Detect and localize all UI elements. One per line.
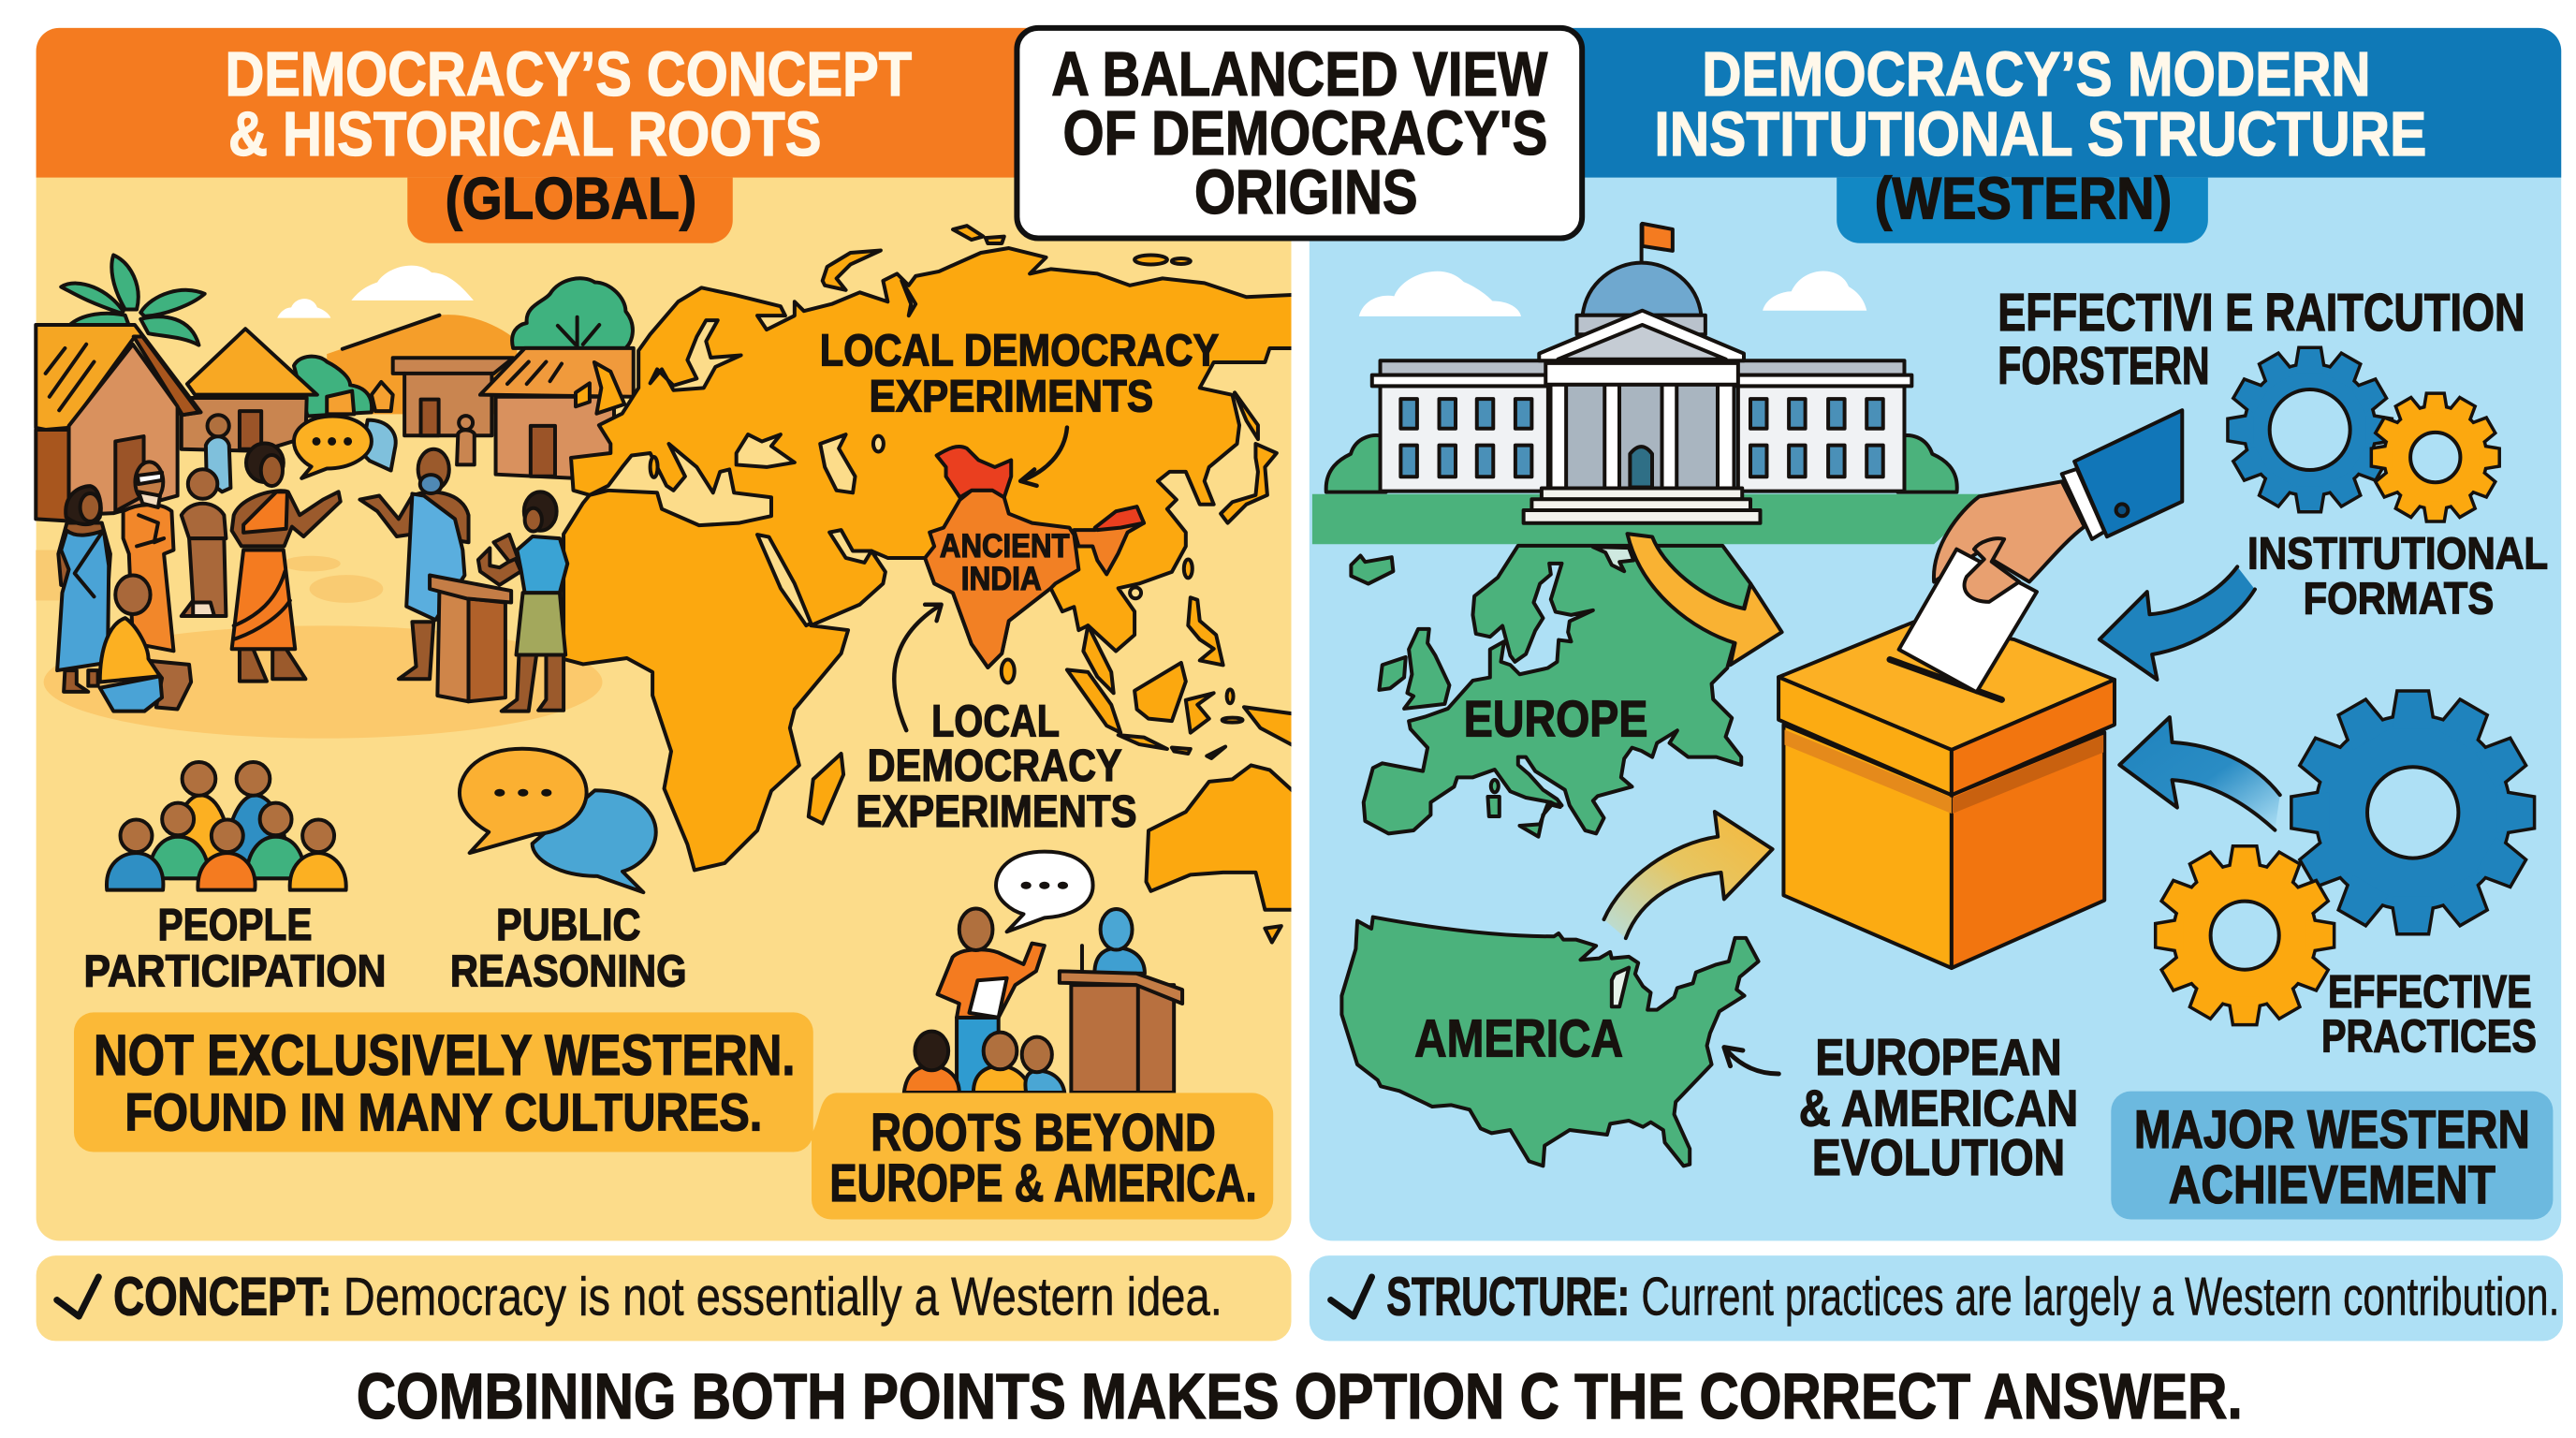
map of america — [1341, 917, 1759, 1166]
effective institution label: FORSTERN — [1998, 336, 2210, 395]
ancient india label — [940, 528, 1070, 597]
concept summary strip: Democracy is not essentially a Western idea. — [344, 1267, 1222, 1327]
left header tab — [407, 178, 733, 243]
eurasia and africa — [564, 248, 1295, 870]
conclusion: COMBINING BOTH POINTS MAKES OPTION C THE CORRECT ANSWER. — [357, 1360, 2243, 1432]
left header band — [37, 28, 1051, 178]
india highlight — [925, 447, 1144, 682]
people participation label: PEOPLE — [157, 900, 312, 950]
title box: OF DEMOCRACY'S — [1063, 99, 1547, 169]
effective practices label — [2321, 967, 2537, 1062]
gear: upper orange — [2373, 395, 2497, 520]
ancient india label: INDIA — [961, 561, 1042, 597]
right header band — [1544, 28, 2561, 178]
hand casting ballot — [1899, 410, 2182, 692]
european and american evolution label: & AMERICAN — [1799, 1079, 2078, 1137]
people participation label: PARTICIPATION — [84, 946, 386, 996]
villager: man in brown — [182, 469, 226, 616]
icon: check mark — [1331, 1277, 1372, 1316]
callout: not exclusively western: FOUND IN MANY CULTURES. — [124, 1083, 762, 1142]
right header tab — [1837, 178, 2208, 243]
left heading: (GLOBAL) — [446, 166, 696, 231]
capitol building — [1326, 224, 1957, 523]
map labels — [820, 326, 1219, 422]
gear: lower orange — [2157, 847, 2333, 1023]
arrow to india from north — [1020, 428, 1067, 486]
title box: A BALANCED VIEW — [1051, 40, 1547, 110]
public reasoning label: REASONING — [450, 946, 687, 996]
callout: roots beyond europe and america: EUROPE & AMERICA. — [829, 1153, 1257, 1212]
institutional formats label: FORMATS — [2304, 574, 2494, 624]
gear: upper blue — [2230, 349, 2391, 510]
effective practices label: EFFECTIVE — [2328, 967, 2532, 1018]
callout: not exclusively western — [74, 1012, 813, 1152]
callout: major western achievement — [2111, 1092, 2553, 1220]
panel: concept and historical roots — [37, 28, 1292, 1240]
map labels: LOCAL DEMOCRACY — [820, 326, 1219, 376]
villager: woman in blue — [57, 486, 110, 692]
lower map label: DEMOCRACY — [868, 741, 1122, 791]
title box: ORIGINS — [1194, 158, 1418, 227]
callout: major western achievement: ACHIEVEMENT — [2169, 1155, 2496, 1215]
village ground — [36, 550, 603, 739]
villager: seated figure — [100, 575, 191, 712]
seas — [590, 281, 1141, 625]
lower map label — [856, 696, 1137, 837]
icon: crowd of people — [107, 762, 346, 890]
world map — [564, 226, 1295, 943]
callout: not exclusively western: NOT EXCLUSIVELY WESTERN. — [94, 1023, 795, 1088]
lower map label: EXPERIMENTS — [856, 786, 1137, 837]
europe label: EUROPE — [1464, 690, 1647, 747]
arrow: gears to ballot box — [2119, 717, 2280, 830]
arrow: evolution label to america — [1724, 1048, 1778, 1074]
map labels: EXPERIMENTS — [869, 372, 1153, 422]
public reasoning label: PUBLIC — [496, 900, 640, 950]
podium — [430, 575, 511, 701]
map of europe — [1351, 546, 1750, 837]
right heading: DEMOCRACY’S MODERN — [1702, 40, 2371, 110]
lower map label: LOCAL — [931, 696, 1060, 746]
european and american evolution label — [1799, 1029, 2078, 1186]
concept summary strip: CONCEPT: — [113, 1267, 332, 1327]
icon: speaker at podium with audience — [904, 852, 1182, 1093]
european and american evolution label: EVOLUTION — [1812, 1129, 2065, 1186]
islands — [576, 226, 1295, 943]
villagers in discussion — [57, 415, 567, 712]
panel: modern institutional structure — [1310, 28, 2561, 1240]
left heading: DEMOCRACY’S CONCEPT — [225, 40, 912, 110]
european and american evolution label: EUROPEAN — [1815, 1029, 2062, 1086]
structure summary strip: STRUCTURE: — [1386, 1267, 1630, 1327]
arrow to india from south — [894, 605, 942, 730]
callout: roots beyond europe and america — [812, 1093, 1273, 1220]
institutional formats label — [2247, 528, 2548, 624]
right heading: (WESTERN) — [1875, 166, 2172, 231]
icon: lower gears — [2157, 693, 2533, 1023]
structure summary strip — [1310, 1255, 2563, 1341]
public reasoning label — [450, 900, 687, 996]
concept summary strip — [37, 1255, 1292, 1341]
village clouds — [277, 266, 474, 318]
arrow: america to ballot box — [1604, 812, 1773, 938]
arrow: institutional formats to ballot box — [2100, 566, 2255, 680]
villager: speaker in orange robe — [232, 444, 341, 682]
icon: public reasoning bubbles — [460, 749, 656, 892]
great lakes — [1612, 968, 1629, 1006]
ballot box — [1778, 622, 2115, 968]
speech bubbles in village — [294, 416, 396, 478]
gear: lower blue — [2293, 693, 2533, 932]
distant villagers — [206, 415, 475, 492]
capitol lawn — [1312, 494, 1989, 544]
villager: figure in green skirt — [478, 492, 567, 712]
capitol clouds — [1359, 271, 1866, 316]
icon: upper gears — [2230, 349, 2497, 520]
right heading — [1654, 40, 2426, 231]
america label: AMERICA — [1414, 1009, 1623, 1068]
ancient india label: ANCIENT — [940, 528, 1070, 565]
villager: man in blue sash — [359, 449, 469, 679]
title box — [1017, 28, 1582, 239]
left heading — [225, 40, 912, 231]
village huts, hill and trees — [36, 255, 634, 521]
people participation label — [84, 900, 386, 996]
left heading: & HISTORICAL ROOTS — [228, 100, 822, 169]
callout: roots beyond europe and america: ROOTS BEYOND — [871, 1103, 1216, 1162]
villager: elder in orange — [124, 462, 173, 651]
effective institution label — [1998, 283, 2525, 395]
arrow: capitol to ballot box — [1628, 534, 1782, 665]
icon: check mark — [57, 1277, 98, 1316]
right heading: INSTITUTIONAL STRUCTURE — [1654, 100, 2426, 169]
